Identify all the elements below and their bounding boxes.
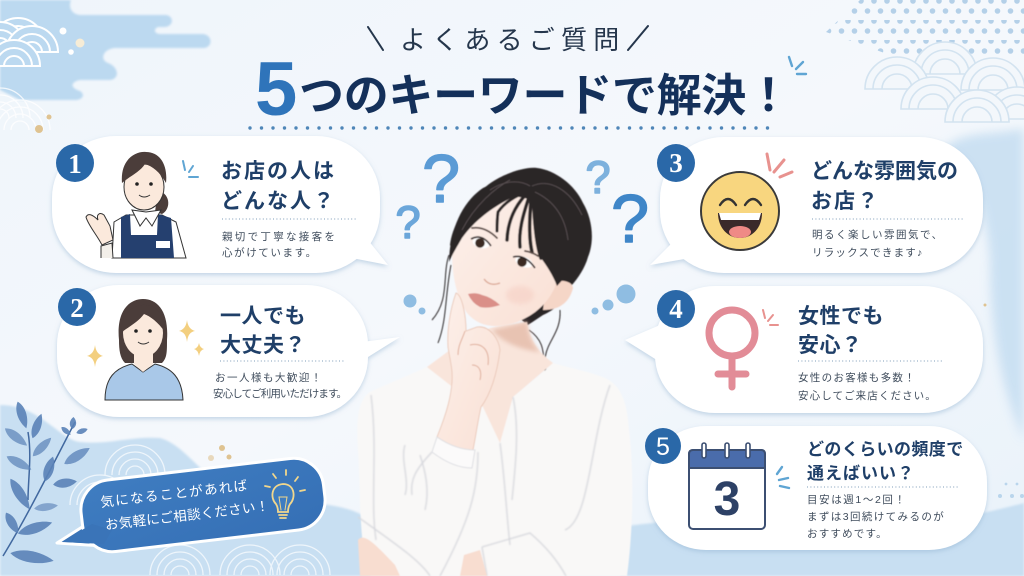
face xyxy=(452,197,556,326)
gold and white dots xyxy=(35,28,986,461)
callout text: 気になることがあれば xyxy=(100,478,249,510)
body text 1 xyxy=(222,230,337,259)
title sparkle xyxy=(789,57,806,74)
body text 5 xyxy=(807,494,945,540)
badge 1 xyxy=(56,144,94,182)
smiley rays xyxy=(767,154,792,177)
leaf branch xyxy=(2,400,92,566)
icon: smiley xyxy=(701,172,779,250)
bubble 4 xyxy=(625,286,983,413)
heading 1: どんな人？ xyxy=(221,190,336,213)
bubble 3 xyxy=(650,137,983,273)
panel: question 2 xyxy=(57,285,400,417)
eyes xyxy=(471,236,535,270)
panel: question 1 xyxy=(52,136,388,273)
body text 4: 安心してご来店ください。 xyxy=(798,389,937,402)
finger lines xyxy=(458,331,488,380)
panel: question 4 xyxy=(625,286,983,413)
lower hand xyxy=(358,538,400,576)
big numeral 5: 5 xyxy=(255,47,297,132)
heading 3 xyxy=(811,160,958,213)
icon: woman xyxy=(105,299,183,400)
title block xyxy=(250,25,806,132)
dotted line xyxy=(798,360,943,362)
badge 3: 3 xyxy=(669,148,683,178)
body text 2: 安心してご利用いただけます。 xyxy=(213,387,347,400)
dotted line xyxy=(222,218,357,220)
heading 4: 安心？ xyxy=(798,334,862,357)
heading 4: 女性でも xyxy=(798,305,884,328)
dotted line xyxy=(807,486,960,488)
blouse xyxy=(357,363,632,576)
badge 4 xyxy=(657,290,695,328)
heading 5: どのくらいの頻度で xyxy=(807,440,964,459)
icon: calendar: 3 xyxy=(714,473,740,526)
icon: calendar xyxy=(689,443,765,529)
body text 2: お一人様も大歓迎！ xyxy=(215,371,323,384)
icon: female symbol xyxy=(709,310,755,387)
badge 2: 2 xyxy=(70,293,84,323)
tail join xyxy=(62,524,112,544)
sparkle rays xyxy=(183,161,198,177)
loose strands xyxy=(432,255,560,385)
hair back xyxy=(450,168,592,325)
heading 4 xyxy=(798,305,884,357)
rays xyxy=(777,467,789,488)
ear xyxy=(543,281,573,310)
icon: staff woman xyxy=(86,152,186,258)
body text 1: 心がけています。 xyxy=(222,246,318,259)
question marks xyxy=(395,141,649,257)
question marks: ? xyxy=(585,152,611,203)
callout text xyxy=(100,476,270,533)
callout text: お気軽にご相談ください！ xyxy=(104,498,270,533)
halftone dots xyxy=(826,0,1024,54)
body text 5: まずは3回続けてみるのが xyxy=(807,510,945,523)
callout bubble xyxy=(78,455,328,555)
right slash xyxy=(628,26,648,50)
thought dots xyxy=(404,284,636,314)
badge 1: 1 xyxy=(68,149,82,179)
neck shadow xyxy=(492,322,540,352)
heading 2: 一人でも xyxy=(220,305,306,328)
dotted line xyxy=(220,360,345,362)
heading 5 xyxy=(807,440,964,483)
dotted rule xyxy=(250,126,778,130)
heading 3: お店？ xyxy=(811,190,880,213)
badge 4: 4 xyxy=(669,294,683,324)
mouth xyxy=(468,293,500,308)
heading 2: 大丈夫？ xyxy=(220,334,306,357)
left slash xyxy=(368,27,383,50)
woman photo illustration xyxy=(357,168,632,576)
body text 3: 明るく楽しい雰囲気で、 xyxy=(812,228,944,241)
icon: light bulb xyxy=(265,470,305,518)
panel: question 3 xyxy=(650,137,983,273)
subtitle: よくあるご質問 xyxy=(400,25,625,55)
body text 4: 女性のお客様も多数！ xyxy=(798,371,916,384)
callout tail xyxy=(57,522,104,546)
heading 1 xyxy=(221,160,336,213)
bubble 5 xyxy=(648,426,987,550)
body text 3: リラックスできます♪ xyxy=(812,247,923,259)
bubble 2 xyxy=(57,285,400,417)
body text 2 xyxy=(213,371,347,400)
left hair front xyxy=(449,170,532,262)
see-through bangs xyxy=(497,190,541,258)
body text 5: おすすめです。 xyxy=(807,528,888,540)
cuff xyxy=(432,437,475,468)
heading 5: 通えばいい？ xyxy=(807,464,915,483)
nose xyxy=(484,279,500,284)
small dots near panel 5 xyxy=(998,483,1024,498)
body text 5: 目安は週1〜2回！ xyxy=(807,494,907,506)
dotted line xyxy=(812,218,964,220)
panel: question 5 xyxy=(645,426,987,550)
hand and forearm xyxy=(437,293,500,450)
main title: つのキーワードで解決！ xyxy=(299,70,791,121)
hair highlights xyxy=(462,180,582,240)
question marks: ? xyxy=(422,141,460,217)
body text 3 xyxy=(812,228,944,259)
right hair mass xyxy=(530,187,589,286)
heading 1: お店の人は xyxy=(221,160,336,183)
question marks: ? xyxy=(611,181,649,257)
question marks: ? xyxy=(395,197,421,248)
heading 3: どんな雰囲気の xyxy=(811,160,958,183)
body text 1: 親切で丁寧な接客を xyxy=(222,230,337,243)
blouse folds xyxy=(358,385,610,576)
eyebrows xyxy=(472,228,538,256)
badge 5: 5 xyxy=(656,433,670,461)
other arm skin xyxy=(460,550,487,576)
bubble 1 xyxy=(52,136,388,273)
heading 2 xyxy=(220,305,306,357)
body text 4 xyxy=(798,371,937,402)
callout: consult xyxy=(57,455,328,555)
cheek blush xyxy=(506,286,534,304)
sparkles xyxy=(87,320,204,367)
rays xyxy=(763,310,778,325)
badge 5 xyxy=(645,428,681,464)
neck and chest xyxy=(427,322,553,443)
badge 2 xyxy=(58,288,96,326)
badge 3 xyxy=(657,144,695,182)
